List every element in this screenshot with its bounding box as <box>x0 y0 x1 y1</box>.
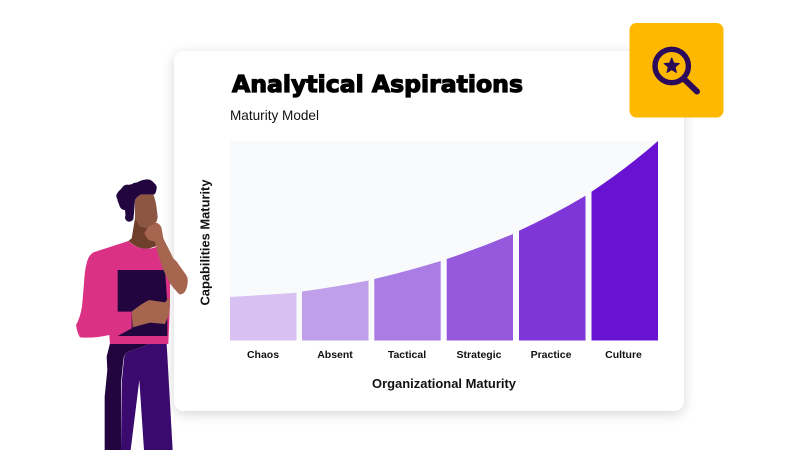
panel: chart card <box>174 51 684 411</box>
bar: Chaos <box>230 293 296 340</box>
bar: Absent <box>302 280 368 340</box>
sweater <box>76 241 177 344</box>
label: Tactical: Tactical <box>388 349 426 361</box>
category labels <box>247 349 642 361</box>
front leg <box>121 343 173 450</box>
label: Strategic: Strategic <box>457 349 502 361</box>
chart: maturity curve <box>230 141 658 340</box>
icon: search badge <box>630 23 724 118</box>
back leg <box>105 343 150 450</box>
label: Culture: Culture <box>605 349 642 361</box>
label: Chaos: Chaos <box>247 349 279 361</box>
y axis title: Capabilities Maturity <box>198 179 212 306</box>
holding hand <box>132 298 170 327</box>
x axis title: Organizational Maturity <box>372 376 517 391</box>
bar: Tactical <box>374 261 441 340</box>
badge <box>630 23 724 118</box>
raised arm <box>144 223 188 294</box>
label: Practice: Practice <box>531 349 572 361</box>
illustration: thinking person <box>76 179 188 450</box>
face <box>135 194 158 228</box>
title: Analytical Aspirations <box>232 70 523 98</box>
star <box>664 58 679 72</box>
neck <box>128 218 160 249</box>
bar: Strategic <box>447 234 513 340</box>
chart background <box>230 141 658 340</box>
bar: Practice <box>519 196 586 340</box>
hair <box>116 179 157 222</box>
tablet <box>118 270 167 336</box>
bar: Culture <box>592 141 658 340</box>
magnifier ring <box>655 49 688 83</box>
subtitle: Maturity Model <box>230 107 319 123</box>
magnifier handle <box>684 79 697 92</box>
label: Absent: Absent <box>317 349 353 361</box>
